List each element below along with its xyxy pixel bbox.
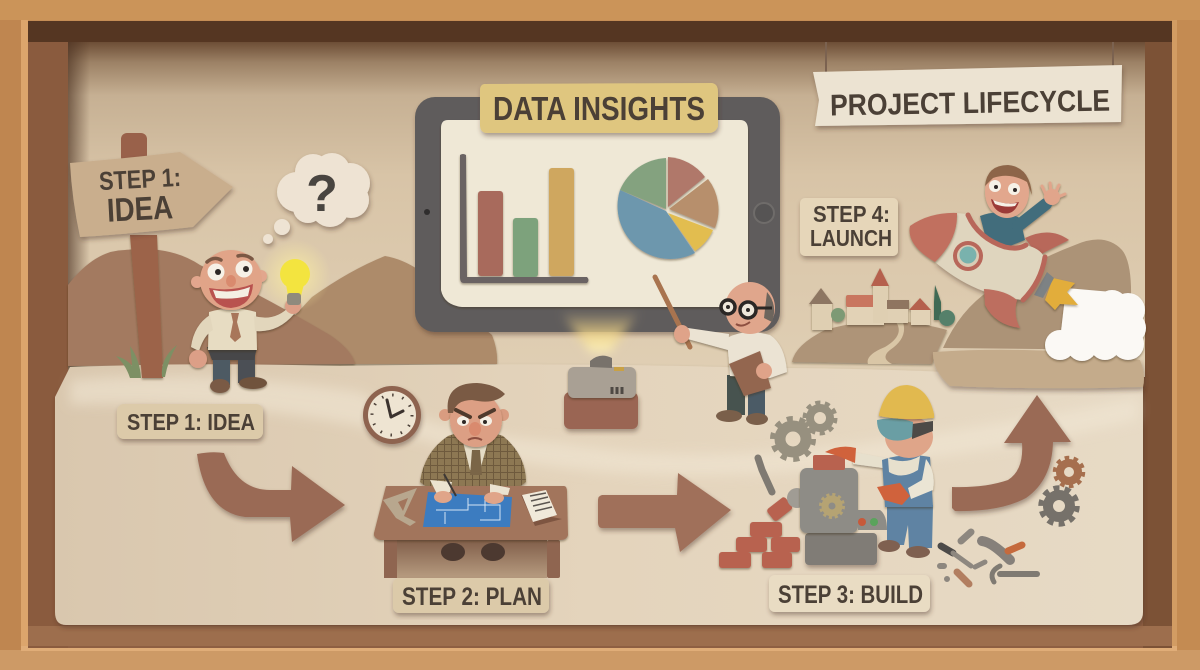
scattered tools xyxy=(940,532,1037,584)
rocket with waving passenger xyxy=(910,165,1146,361)
projector base xyxy=(564,392,638,429)
step 4 label: LAUNCH xyxy=(810,225,892,251)
legs and shoes xyxy=(207,345,267,393)
gear orange xyxy=(1055,458,1083,486)
clay ground base xyxy=(55,364,1143,625)
thought bubble with question mark xyxy=(263,153,370,244)
step 2 label xyxy=(393,578,549,613)
brick machine xyxy=(787,455,887,565)
nozzle xyxy=(1034,272,1054,298)
left brown hill xyxy=(68,249,355,366)
sign text line 1: STEP 1: xyxy=(98,162,182,196)
eyes xyxy=(208,264,224,280)
flame xyxy=(1045,278,1078,310)
icon: grass tufts xyxy=(116,345,177,378)
data insights heading xyxy=(480,83,718,133)
desk legs and shadow xyxy=(384,538,560,578)
rocket body xyxy=(935,213,1044,300)
pie chart xyxy=(618,157,718,259)
planner jacket and head xyxy=(420,383,526,494)
head xyxy=(191,250,267,310)
gears and wrench xyxy=(758,403,835,492)
planner hands and cuffs xyxy=(430,474,510,504)
tablet with chart xyxy=(415,97,780,332)
right brown hill xyxy=(250,256,497,364)
builder gloves xyxy=(825,447,856,463)
projector xyxy=(560,312,640,429)
bottom fin xyxy=(984,289,1020,328)
step 3 label xyxy=(769,575,930,612)
tie xyxy=(230,313,241,342)
sign board xyxy=(70,152,233,237)
character: planner at desk xyxy=(374,383,568,578)
blueprint xyxy=(423,492,512,527)
icon: light bulb xyxy=(280,259,310,305)
rocket nose xyxy=(910,213,957,262)
character: idea man with light bulb xyxy=(189,239,331,393)
character: presenter with pointer xyxy=(655,277,787,425)
clay back wall xyxy=(68,42,1145,377)
side gears xyxy=(1041,458,1083,524)
goggles xyxy=(877,418,933,441)
clipboard with notes xyxy=(521,490,562,526)
gear small xyxy=(805,403,835,433)
project lifecycle hanging banner xyxy=(813,42,1122,126)
mouth xyxy=(209,284,253,308)
presenter coat xyxy=(674,325,787,378)
top fin xyxy=(1025,232,1069,256)
exhaust cloud xyxy=(1045,288,1146,361)
sign text line 2: IDEA xyxy=(106,188,174,229)
clock icon xyxy=(363,386,421,444)
presenter head xyxy=(721,282,775,334)
presenter legs xyxy=(716,375,768,425)
step 4 label: STEP 4: xyxy=(813,201,890,227)
village xyxy=(809,268,955,330)
arrow: idea to plan xyxy=(197,452,345,542)
step 3 label: STEP 3: BUILD xyxy=(778,581,923,609)
builder legs xyxy=(878,505,933,558)
arrow: build to launch xyxy=(952,395,1071,511)
step 4 label xyxy=(800,198,898,256)
tablet camera hole xyxy=(424,209,430,215)
gear grey xyxy=(1041,488,1077,524)
tablet screen xyxy=(441,120,748,307)
step 1 label xyxy=(117,404,263,439)
tablet button xyxy=(754,203,774,223)
desk top xyxy=(374,486,568,540)
gear large xyxy=(773,419,813,459)
projector body xyxy=(568,367,636,398)
passenger xyxy=(980,165,1065,248)
project lifecycle hanging banner: PROJECT LIFECYCLE xyxy=(830,85,1110,122)
rocket rim xyxy=(968,215,1045,300)
step 1 label: STEP 1: IDEA xyxy=(127,409,255,435)
rocket window xyxy=(953,241,983,271)
bricks xyxy=(719,496,800,568)
arrow: plan to build xyxy=(598,473,731,552)
launch hills and platform xyxy=(792,240,1144,388)
bar chart xyxy=(460,154,588,283)
builder head xyxy=(885,416,933,458)
pointer stick xyxy=(655,277,690,347)
character: builder with hard hat xyxy=(825,385,934,558)
builder torso xyxy=(853,452,934,507)
set square ruler xyxy=(383,488,417,526)
light beam xyxy=(560,312,640,352)
signpost with step 1 sign xyxy=(70,133,233,378)
wrench xyxy=(758,458,772,492)
step 2 label: STEP 2: PLAN xyxy=(402,583,542,611)
hard hat xyxy=(879,385,934,419)
presenter clipboard xyxy=(729,351,771,396)
tablet body xyxy=(415,97,780,332)
question mark: ? xyxy=(306,165,338,223)
data insights heading: DATA INSIGHTS xyxy=(493,90,705,127)
shirt and arms xyxy=(189,298,301,368)
